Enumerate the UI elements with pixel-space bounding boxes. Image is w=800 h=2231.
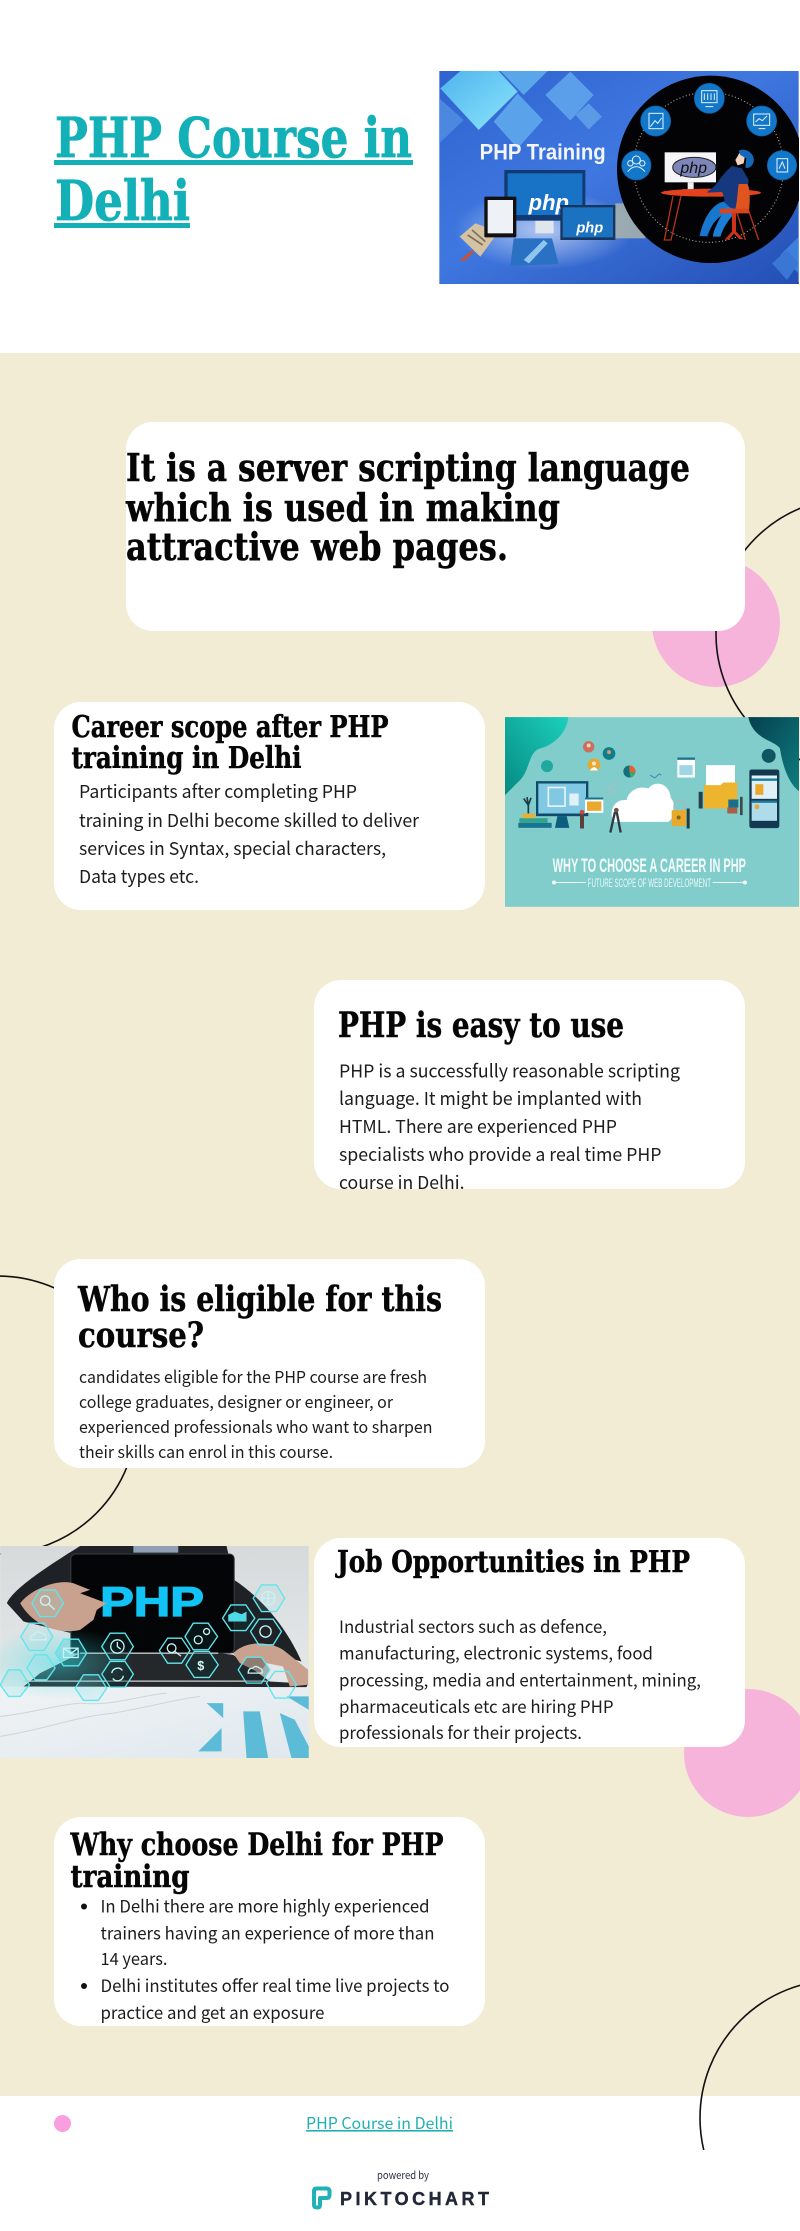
title bbox=[54, 105, 413, 230]
panel: who is eligible bbox=[54, 1259, 485, 1468]
heading: who is eligible bbox=[77, 1280, 442, 1356]
text: career scope: Data types etc. bbox=[79, 863, 199, 889]
black circle with developer: php bbox=[679, 160, 707, 177]
devices illustration bbox=[460, 170, 645, 266]
cyan glow bbox=[0, 1627, 133, 1700]
text: job opportunities: pharmaceuticals etc are hiring PHP bbox=[339, 1693, 614, 1718]
text: who is eligible: experienced professionals who want to sharpen bbox=[79, 1414, 432, 1438]
devices illustration: php bbox=[575, 221, 603, 237]
image: PHP laptop photo: $ bbox=[197, 1659, 204, 1673]
heading: server scripting language bbox=[125, 445, 690, 569]
symbols in hexagons bbox=[30, 1592, 275, 1681]
text: who is eligible: their skills can enrol in this course. bbox=[79, 1439, 333, 1463]
decorative arc upper right bbox=[715, 508, 800, 760]
panel: easy to use bbox=[314, 980, 745, 1189]
chart bars bbox=[198, 1696, 309, 1758]
heading: career scope bbox=[72, 710, 388, 776]
panel: why choose Delhi bbox=[54, 1817, 485, 2026]
heading: server scripting language: attractive web pages. bbox=[126, 524, 508, 569]
bullet list: why choose Delhi: 14 years. bbox=[100, 1945, 168, 1970]
panel: server scripting language bbox=[126, 422, 745, 631]
hexagon icons bbox=[0, 1585, 296, 1700]
decorative arc middle left bbox=[0, 1275, 128, 1555]
text: easy to use bbox=[339, 1060, 680, 1195]
text: who is eligible: college graduates, designer or engineer, or bbox=[79, 1389, 394, 1413]
image: why choose a career in PHP bbox=[505, 717, 799, 907]
text: who is eligible bbox=[79, 1366, 432, 1463]
text: job opportunities: processing, media and entertainment, mining, bbox=[339, 1666, 701, 1692]
panel: job opportunities bbox=[314, 1538, 745, 1747]
hands bbox=[20, 1582, 308, 1686]
text: easy to use: language. It might be implanted with bbox=[339, 1085, 642, 1111]
heading: who is eligible: course? bbox=[78, 1315, 204, 1356]
text: job opportunities: professionals for their projects. bbox=[339, 1719, 582, 1744]
panel: career scope bbox=[54, 702, 485, 910]
heading: why choose Delhi bbox=[70, 1827, 444, 1895]
decorative arc lower right bbox=[699, 1984, 800, 2150]
text: easy to use: HTML. There are experienced PHP bbox=[339, 1113, 617, 1139]
decorative pink circle lower right bbox=[684, 1689, 800, 1817]
black circle with developer bbox=[617, 76, 800, 263]
heading: career scope: training in Delhi bbox=[72, 741, 302, 776]
text: job opportunities bbox=[339, 1616, 701, 1744]
text: job opportunities: manufacturing, electronic systems, food bbox=[339, 1640, 653, 1664]
heading in banner: PHP Training bbox=[480, 139, 606, 164]
image: PHP Training banner bbox=[439, 71, 799, 284]
text: career scope: training in Delhi become skilled to deliver bbox=[79, 807, 420, 833]
text: career scope: services in Syntax, special characters, bbox=[79, 835, 386, 861]
heading: server scripting language: which is used in making bbox=[125, 485, 560, 530]
icon: Piktochart logo bbox=[312, 2186, 332, 2210]
bullet list: why choose Delhi: trainers having an experience of more than bbox=[100, 1920, 434, 1945]
footer pink dot bbox=[54, 2115, 71, 2132]
text: easy to use: course in Delhi. bbox=[339, 1169, 464, 1195]
bullet list: why choose Delhi: Delhi institutes offer real time live projects to bbox=[100, 1972, 450, 1997]
powered by label: powered by bbox=[377, 2168, 429, 2183]
decorative pink circle upper right bbox=[652, 559, 780, 687]
illustration: people, cloud and devices bbox=[518, 741, 779, 832]
bullet list: why choose Delhi: practice and get an exposure bbox=[100, 1999, 324, 2024]
text on laptop screen: PHP bbox=[100, 1579, 204, 1625]
beige background band bbox=[0, 353, 800, 2096]
image: PHP laptop photo bbox=[0, 1546, 309, 1758]
text: easy to use: specialists who provide a real time PHP bbox=[339, 1141, 662, 1167]
heading: why choose Delhi: training bbox=[70, 1859, 190, 1895]
text: career scope bbox=[79, 780, 420, 889]
bullet list: why choose Delhi bbox=[81, 1896, 450, 2024]
devices illustration: php bbox=[528, 190, 569, 215]
